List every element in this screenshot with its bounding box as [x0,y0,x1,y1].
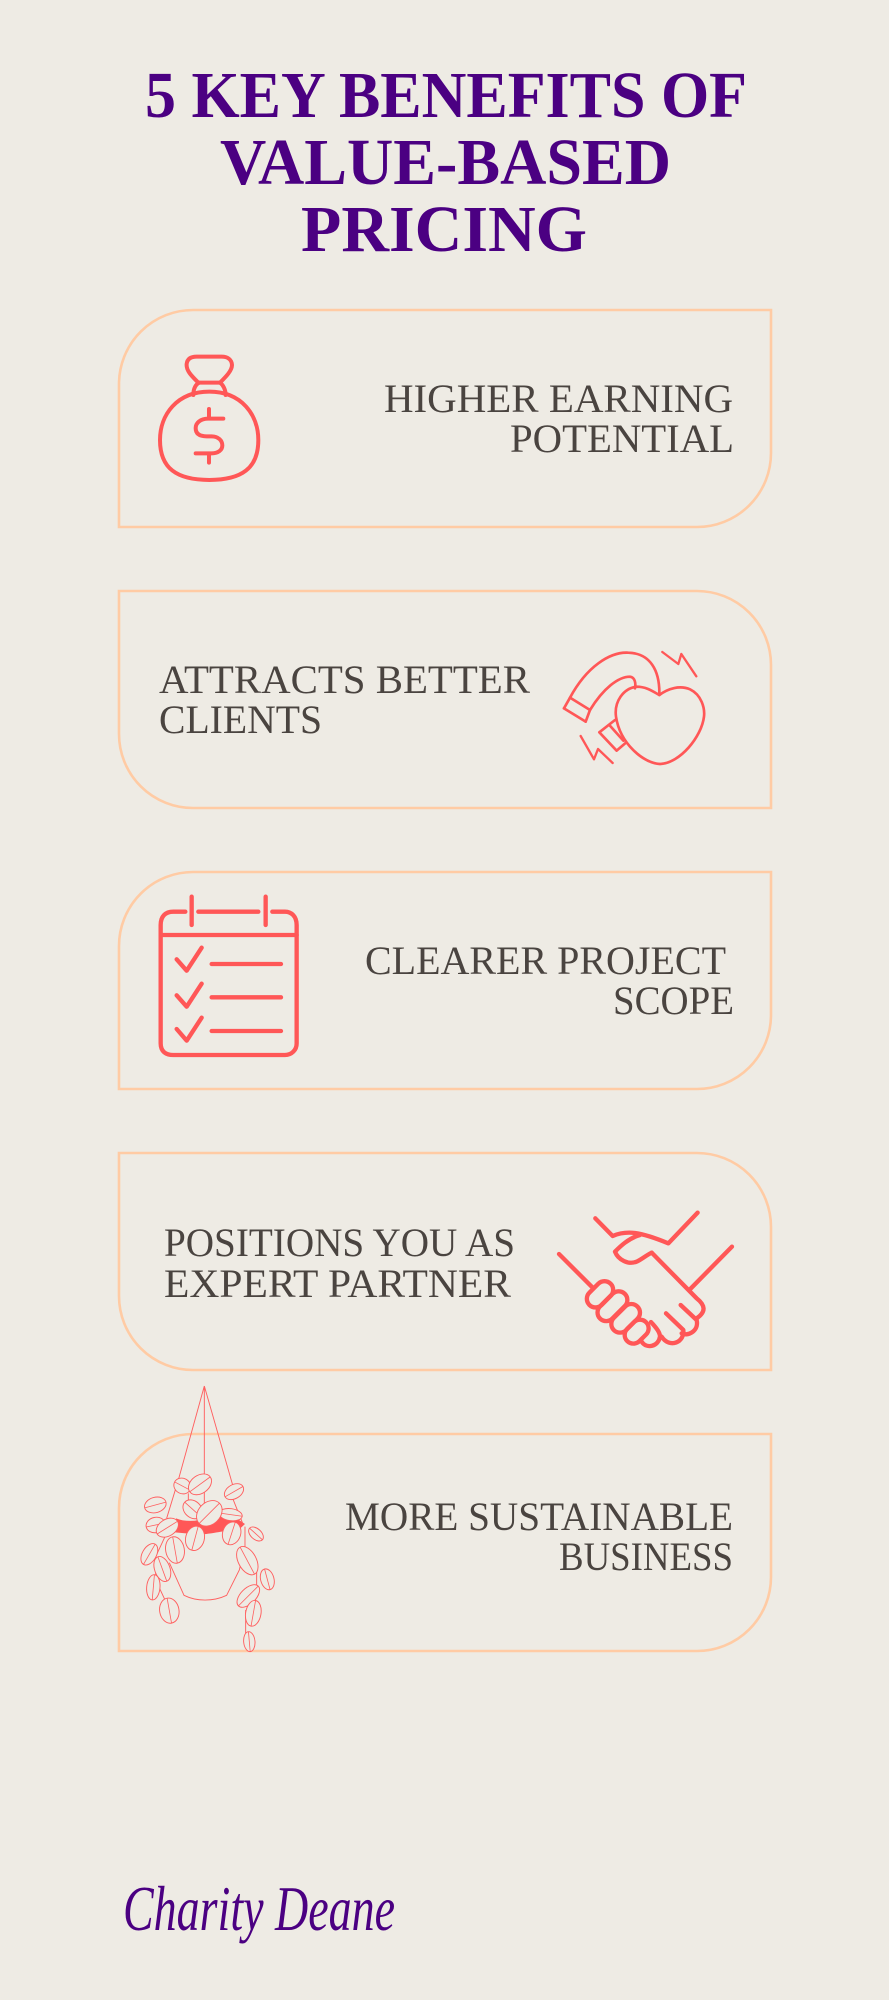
panel: clearer project scope [119,872,771,1089]
text: clearer project scope: SCOPE [613,978,734,1023]
panel: positions you as expert partner [119,1153,771,1370]
icon: magnet attracting heart [564,652,704,764]
panel: more sustainable business [119,1386,771,1652]
text: attracts better clients: CLIENTS [159,697,322,742]
text: higher earning potential [384,376,734,461]
text: attracts better clients: ATTRACTS BETTER [159,657,530,702]
text: more sustainable business: BUSINESS [559,1534,733,1579]
panel: higher earning potential [119,310,771,527]
text: clearer project scope: CLEARER PROJECT [365,938,726,983]
text: higher earning potential: HIGHER EARNING [384,376,733,421]
text: more sustainable business [345,1494,733,1579]
signature: Charity Deane [123,1873,395,1944]
title: VALUE-BASED [220,126,671,199]
icon: money bag [160,357,258,480]
text: clearer project scope [365,938,734,1023]
text: positions you as expert partner: EXPERT PARTNER [164,1261,511,1306]
title: PRICING [301,193,587,266]
icon: checklist calendar [161,897,297,1055]
text: more sustainable business: MORE SUSTAINABLE [345,1494,733,1539]
icon: hanging plant [137,1386,277,1652]
text: higher earning potential: POTENTIAL [510,416,734,461]
icon: handshake [559,1213,732,1347]
panel: attracts better clients [119,591,771,808]
text: positions you as expert partner: POSITIONS YOU AS [164,1220,515,1265]
title: 5 KEY BENEFITS OF [145,59,747,132]
text: attracts better clients [159,657,530,742]
title [145,59,747,266]
text: positions you as expert partner [164,1220,515,1306]
